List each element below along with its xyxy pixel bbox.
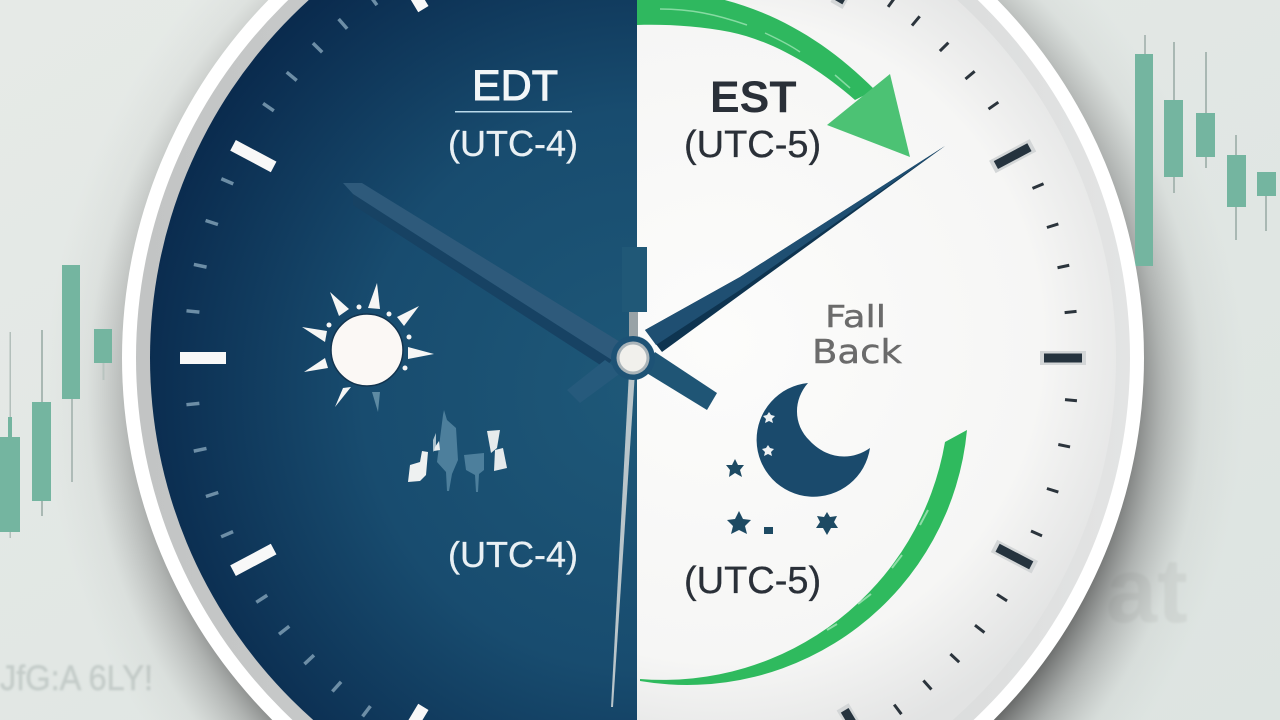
hand: left minute hand (343, 183, 625, 368)
hour ticks: left (180, 0, 429, 720)
panel: EDT dark half (150, 0, 637, 720)
label: UTC-5 lower: (UTC-5) (684, 560, 821, 602)
label: UTC-4 lower: (UTC-4) (448, 534, 578, 575)
hand: faint tail lower left (567, 360, 622, 403)
hand: right long hand (645, 146, 945, 352)
clock (122, 0, 1144, 720)
label: EST: EST (710, 73, 797, 122)
panel: EST light half (637, 0, 1106, 720)
icon: stars (726, 459, 838, 535)
label: Fall Back: Back (812, 332, 903, 371)
stub above clock hub (622, 247, 647, 348)
divider under EDT (455, 111, 572, 112)
left candlestick chart (0, 265, 112, 538)
hand: short tail lower right (645, 352, 717, 410)
right candlestick chart (1135, 35, 1276, 266)
clock inner bevel (136, 0, 1130, 720)
clock outer white ring (122, 0, 1144, 720)
label: EDT: EDT (472, 62, 558, 110)
label: UTC-4 upper: (UTC-4) (448, 123, 578, 164)
ghost caption bottom right: at (1106, 540, 1188, 642)
icon: ghost candles on dark half (408, 410, 507, 492)
green arrow: top (637, 0, 910, 157)
hand: second hand (611, 372, 635, 707)
green arrow: bottom swoosh (640, 430, 967, 685)
minor ticks: right (887, 0, 1077, 715)
minor ticks: left (186, 0, 378, 717)
ghost caption bottom left: JfG:A 6LY! (0, 659, 153, 698)
label: Fall Back: Fall (825, 300, 886, 335)
label: Fall Back (812, 300, 903, 371)
hour ticks: right (835, 0, 1082, 720)
hub (611, 336, 655, 380)
hour ticks: right frames (830, 0, 1086, 720)
label: UTC-5 upper: (UTC-5) (684, 124, 821, 166)
icon: moon (757, 383, 870, 497)
icon: sun (302, 283, 434, 412)
